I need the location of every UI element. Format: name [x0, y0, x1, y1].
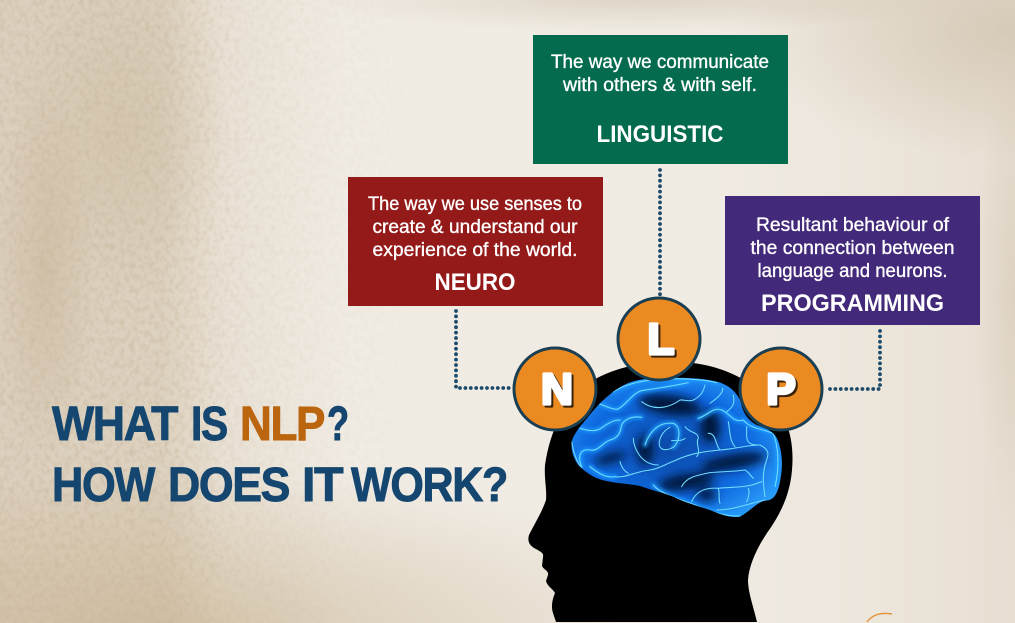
- linguistic description: with others & with self.: [562, 74, 757, 96]
- connector: L dotted line: [658, 170, 662, 295]
- background grain: [0, 0, 338, 620]
- circle: P: [740, 348, 822, 430]
- icon: head silhouette: [528, 362, 793, 622]
- neuro description: experience of the world.: [372, 239, 578, 261]
- connector: N dotted line: [456, 311, 511, 388]
- title: [52, 398, 507, 512]
- circle: L: L: [650, 317, 676, 366]
- circle: L: [618, 298, 700, 380]
- title: DOES: [168, 459, 289, 512]
- icon: glowing brain: [571, 378, 782, 517]
- panel: linguistic: [533, 35, 788, 164]
- programming description: the connection between: [750, 237, 954, 259]
- programming description: Resultant behaviour of: [756, 214, 950, 236]
- circle: N: N: [541, 365, 573, 414]
- linguistic description: [551, 51, 769, 96]
- title: IT: [302, 459, 343, 512]
- programming description: language and neurons.: [758, 260, 948, 282]
- programming heading: PROGRAMMING: [761, 290, 944, 317]
- neuro description: [368, 193, 582, 261]
- programming description: [750, 214, 954, 282]
- panel: neuro: [348, 177, 603, 306]
- title: HOW: [52, 459, 156, 512]
- connector: P dotted line: [826, 331, 880, 389]
- title: NLP: [240, 398, 324, 451]
- title: ?: [327, 398, 348, 451]
- neuro heading: NEURO: [434, 269, 516, 296]
- linguistic heading: LINGUISTIC: [596, 121, 724, 148]
- circle: L: L: [648, 315, 674, 364]
- title: IS: [191, 398, 227, 451]
- neuro description: create & understand our: [372, 216, 578, 238]
- circle: P: P: [768, 367, 798, 416]
- linguistic description: The way we communicate: [551, 51, 769, 73]
- title: WHAT: [52, 398, 178, 451]
- panel: programming: [725, 196, 980, 325]
- title: WORK?: [351, 459, 507, 512]
- circle: N: [514, 348, 596, 430]
- icon: orange swoosh fragment: [867, 613, 892, 622]
- circle: N: N: [543, 367, 575, 416]
- neuro description: The way we use senses to: [368, 193, 582, 215]
- circle: P: P: [766, 365, 796, 414]
